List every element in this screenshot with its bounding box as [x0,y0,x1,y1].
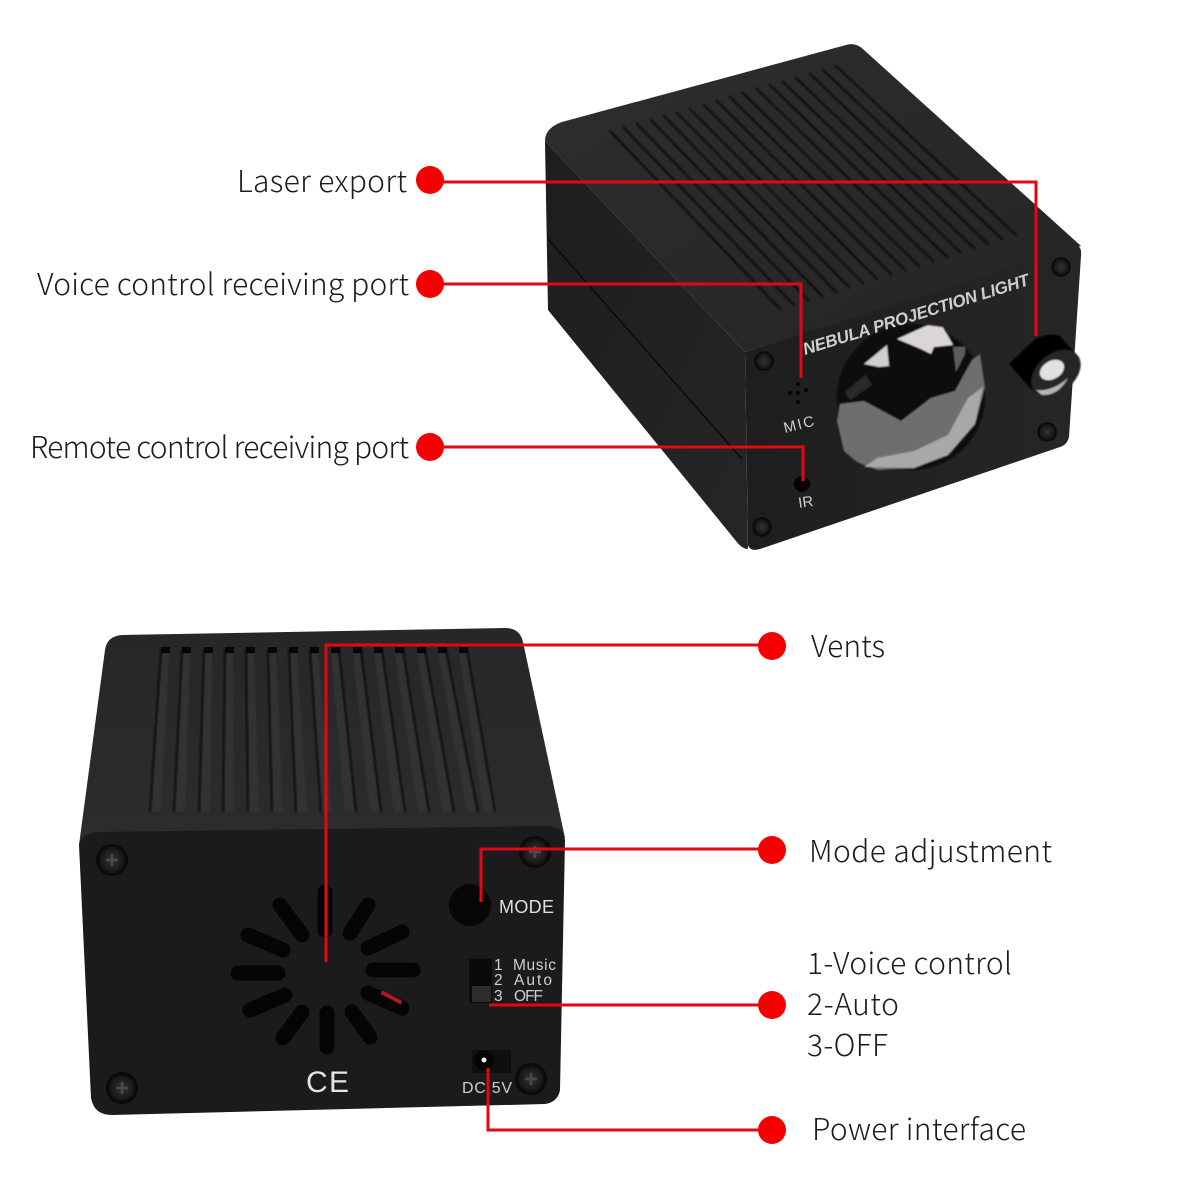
device: front view of projector [545,44,1090,550]
switch labels: 3 [494,988,503,1005]
callout: switch positions: 2-Auto [807,980,899,1024]
slide switch [469,959,492,1003]
mic holes [788,382,808,404]
callout: switch positions: 1-Voice control [807,939,1012,983]
switch labels: OFF [514,988,543,1005]
device: rear view of projector [79,628,565,1115]
switch labels: Auto [514,972,552,989]
lens [837,324,985,470]
MODE label: MODE [499,897,554,917]
mode button [449,884,491,926]
rear face [79,826,565,1115]
left side face [545,141,748,549]
callout: vents: Vents [811,622,885,666]
CE mark: CE [306,1066,349,1099]
front face [745,246,1081,550]
callout: vents [326,622,885,962]
callout: voice control receiving port [37,260,801,378]
callout: laser export: Laser export [237,157,407,201]
speaker vent [238,892,413,1047]
MIC label: MIC [782,413,816,437]
callout: mode adjustment [481,827,1052,902]
callout: power interface: Power interface [812,1105,1026,1149]
callout: remote control receiving port: Remote control receiving port [30,423,409,467]
callout: mode adjustment: Mode adjustment [809,827,1052,871]
top face with slots [79,628,565,845]
callout: laser export [237,157,1036,336]
top face with vents [545,44,1081,352]
screws [97,837,550,1103]
callout: switch positions: 3-OFF [807,1021,888,1065]
callout: switch positions [489,939,1012,1065]
switch labels: Music [513,957,556,974]
callout: power interface [488,1068,1026,1149]
switch labels: 2 [494,972,503,989]
callout: voice control receiving port: Voice control receiving port [37,260,409,304]
IR label: IR [797,493,815,512]
DC 5V label: DC 5V [462,1080,512,1097]
laser outlet [1009,335,1090,406]
screws [753,258,1070,536]
product name text: NEBULA PROJECTION LIGHT [801,270,1033,359]
side seam [548,239,742,459]
callout: remote control receiving port [30,423,803,481]
switch labels: 1 [494,957,503,974]
switch labels [494,957,556,1005]
IR receiver [794,476,810,492]
power jack [472,1050,511,1073]
